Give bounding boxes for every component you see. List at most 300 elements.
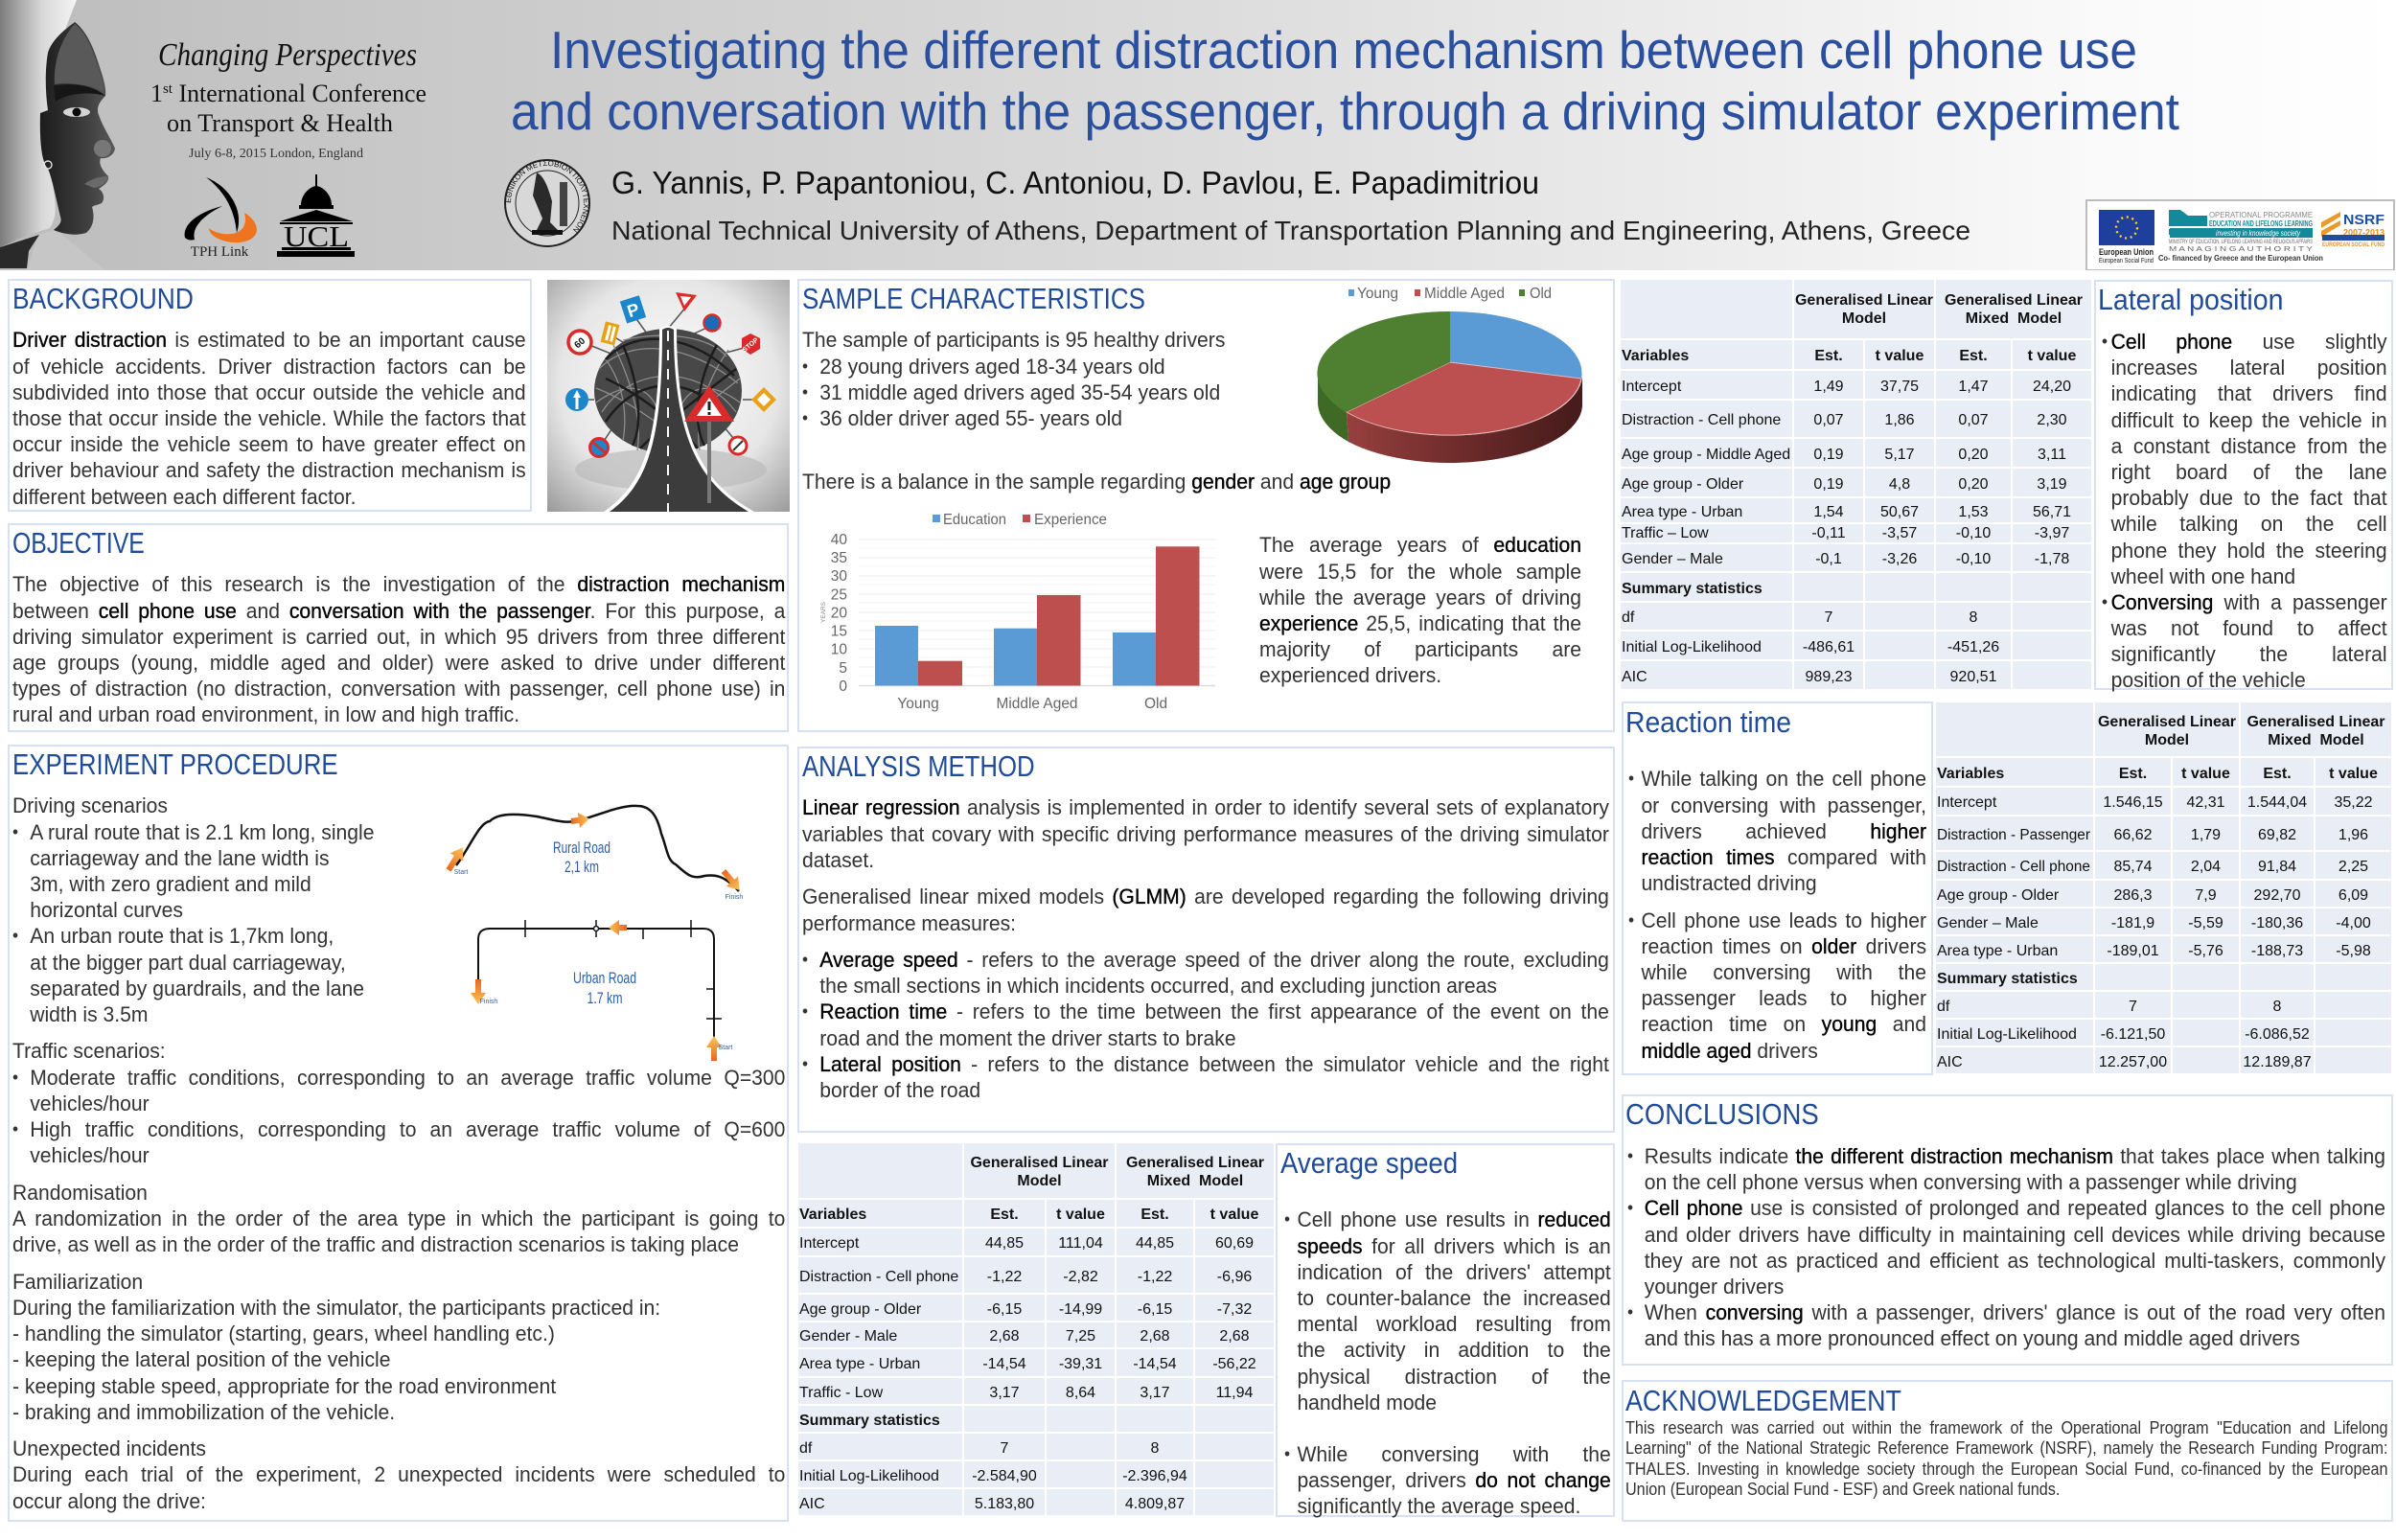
text: reaction time body: • <box>1628 910 1634 930</box>
panel: background <box>8 279 532 512</box>
table: reaction time results: Summary statistics <box>1937 970 2078 987</box>
table: lateral position results: 1,49 <box>1813 378 1844 395</box>
table: reaction time results: Gender – Male <box>1937 914 2039 931</box>
icon: face profile illusion <box>0 0 115 270</box>
table: reaction time results: -6.086,52 <box>2245 1025 2310 1043</box>
text: education and experience: experienced drivers. <box>1259 663 1441 687</box>
table: reaction time results: Age group - Older <box>1937 887 2059 903</box>
text: education and experience: majority of participants are <box>1259 637 1581 661</box>
table: average speed results: AIC <box>799 1495 825 1512</box>
table: reaction time results: 1,79 <box>2191 826 2221 843</box>
conference title text: International Conference <box>173 80 426 107</box>
text: lateral position body: significantly the lateral <box>2111 642 2387 666</box>
text: education and experience: The average years of education <box>1259 533 1581 557</box>
text: experiment procedure body: - handling the simulator (starting, gears, wheel handling etc.) <box>12 1322 555 1345</box>
title: and conversation with the passenger, through a driving simulator experiment <box>511 82 2179 141</box>
table: reaction time results: Model <box>2145 732 2189 747</box>
text: lateral position body: while talking on the cell <box>2111 512 2387 536</box>
conference title text <box>150 37 426 161</box>
text: experiment procedure body: - keeping the lateral position of the vehicle <box>12 1347 390 1371</box>
table: lateral position results: Model <box>1842 310 1886 327</box>
table: reaction time results: 2,04 <box>2191 859 2221 875</box>
text: analysis method body: Reaction time - refers to the time between the first appearance of the event on the <box>819 1000 1609 1023</box>
table: average speed results: 111,04 <box>1058 1235 1103 1252</box>
text: reaction time body: or conversing with passenger, <box>1641 793 1926 817</box>
table: reaction time results: Area type - Urban <box>1937 943 2058 958</box>
table: average speed results: 8,64 <box>1066 1384 1095 1401</box>
funding logos box: European Union <box>2099 247 2154 258</box>
table: average speed results: -2.396,94 <box>1122 1468 1187 1483</box>
diagram: rural and urban road routes: Finish <box>726 894 743 901</box>
table: lateral position results: 0,19 <box>1813 475 1844 493</box>
table: average speed results: 3,17 <box>1140 1384 1170 1401</box>
table: lateral position results: 0,07 <box>1813 412 1844 428</box>
table: lateral position results: 1,54 <box>1813 504 1844 519</box>
diagram: rural and urban road routes <box>447 805 743 1061</box>
heading: acknowledgement: ACKNOWLEDGEMENT <box>1625 1384 1901 1417</box>
icon: TPH Link logo: TPH Link <box>191 244 249 260</box>
funding logos box: MINISTRY OF EDUCATION, LIFELONG LEARNING AND RELIGIOUS AFFAIRS <box>2169 240 2313 245</box>
table: reaction time results: t value <box>2181 765 2230 782</box>
table: average speed results: t value <box>1210 1207 1258 1223</box>
text: acknowledgement body: Learning" of the National Strategic Reference Framework (NSRF), namely the Research Funding Program: <box>1625 1437 2388 1458</box>
text: experiment procedure body: Driving scenarios <box>12 793 168 817</box>
table: lateral position results: Gender – Male <box>1622 551 1723 567</box>
text: sample description: 28 young drivers aged 18-34 years old <box>819 355 1165 379</box>
funding logos box: investing in knowledge society <box>2216 229 2301 238</box>
text: lateral position body: increases lateral position <box>2111 356 2387 379</box>
heading: conclusions: CONCLUSIONS <box>1625 1097 1819 1131</box>
text: reaction time body: reaction times compared with <box>1641 845 1926 869</box>
icon: TPH Link logo <box>185 177 257 260</box>
text: analysis method body: the small sections in which incidents occurred, and excluding junction areas <box>819 974 1497 998</box>
funding logos box: OPERATIONAL PROGRAMME <box>2209 211 2313 219</box>
text: objective body: rural and urban road environment, in low and high traffic. <box>12 702 519 726</box>
text: experiment procedure body: drive, as well as in the order of the traffic and distraction scenarios is taking place <box>12 1232 739 1256</box>
chart: education and experience bars: Middle Aged <box>997 696 1077 712</box>
table: reaction time results: 7 <box>2129 999 2137 1014</box>
table: reaction time results: 35,22 <box>2334 794 2373 811</box>
table: reaction time results: Generalised Linear <box>2098 713 2236 730</box>
funding logos box: 2007-2013 <box>2343 228 2384 239</box>
panel: conclusions <box>1622 1094 2393 1366</box>
icon: road ball with traffic signs <box>547 280 790 512</box>
table: reaction time results: 7,9 <box>2195 887 2217 903</box>
panel: acknowledgement <box>1622 1380 2393 1522</box>
icon: road ball with traffic signs: 60 <box>573 335 587 351</box>
table: reaction time results: 1,96 <box>2338 826 2368 843</box>
diagram: rural and urban road routes: Start <box>454 869 468 876</box>
text: experiment procedure body: width is 3.5m <box>30 1002 148 1026</box>
text: analysis method body: performance measures: <box>802 911 1016 935</box>
heading: lateral position: Lateral position <box>2098 283 2283 316</box>
text: education and experience: experience 25,5, indicating that the <box>1259 611 1581 635</box>
table: reaction time results: 2,25 <box>2338 859 2368 875</box>
text: objective body: between cell phone use and conversation with the passenger. For this purpose, a <box>12 599 785 623</box>
table: average speed results: t value <box>1056 1207 1105 1223</box>
funding logos box <box>2086 200 2394 270</box>
panel: experiment procedure <box>8 745 789 1522</box>
chart: education and experience bars: Experience <box>1034 512 1107 528</box>
panel: lateral position <box>2094 280 2393 690</box>
table: average speed results: Gender - Male <box>799 1328 897 1345</box>
text: analysis method body: variables that covary with specific driving performance measures of the driving simulator <box>802 822 1609 846</box>
diagram: rural and urban road routes: Start <box>719 1045 732 1051</box>
panel: analysis method <box>797 747 1615 1133</box>
table: reaction time results: Distraction - Passenger <box>1937 826 2090 843</box>
text: sample description: There is a balance in the sample regarding gender and age group <box>802 470 1391 494</box>
heading: experiment procedure: EXPERIMENT PROCEDURE <box>12 747 338 781</box>
table: lateral position results: -0,10 <box>1956 551 1991 567</box>
text: lateral position body: indicating that drivers find <box>2111 381 2387 405</box>
table: average speed results: -2,82 <box>1063 1269 1098 1284</box>
table: lateral position results: 24,20 <box>2033 378 2071 395</box>
chart: 3D pie of age groups <box>1317 286 1582 463</box>
diagram: rural and urban road routes: 2,1 km <box>564 858 599 876</box>
table: average speed results: 44,85 <box>985 1235 1024 1252</box>
text: average speed body: handheld mode <box>1297 1391 1437 1414</box>
table: average speed results: Mixed Model <box>1147 1173 1243 1189</box>
icon: UCL logo <box>277 174 355 257</box>
table: lateral position results: 0,20 <box>1958 475 1989 493</box>
text: experiment procedure body: at the bigger part dual carriageway, <box>30 951 346 975</box>
table: lateral position results: 50,67 <box>1880 504 1919 519</box>
table: reaction time results: -180,36 <box>2251 914 2303 931</box>
diagram: rural and urban road routes: Rural Road <box>553 839 611 857</box>
text: conclusions body: they are not as practiced and efficient as technological multi-taskers, commonly <box>1645 1249 2385 1273</box>
table: lateral position results: Est. <box>1814 348 1843 364</box>
text: analysis method body <box>802 795 1609 1102</box>
icon: NTUA seal: ΕΘΝΙΚΟΝ ΜΕΤΣΟΒΙΟΝ ΠΟΛΥΤΕΧΝΕΙΟΝ <box>506 161 588 233</box>
text: average speed body: indication of the drivers' attempt <box>1297 1260 1611 1284</box>
table: reaction time results: -5,98 <box>2336 943 2371 958</box>
text: reaction time body: while conversing with the <box>1641 960 1926 984</box>
text: analysis method body: • <box>802 1054 808 1073</box>
text: acknowledgement body: Union (European Social Fund - ESF) and Greek national funds. <box>1625 1479 2060 1499</box>
table: average speed results: -7,32 <box>1217 1301 1252 1317</box>
text: analysis method body: dataset. <box>802 848 874 872</box>
table: lateral position results: 989,23 <box>1806 669 1852 684</box>
text: conclusions body: and this has a more pronounced effect on young and middle aged drivers <box>1645 1326 2300 1350</box>
funding logos box: EDUCATION AND LIFELONG LEARNING <box>2209 219 2313 228</box>
text: experiment procedure body: Familiarization <box>12 1270 143 1294</box>
table: average speed results: Generalised Linear <box>1126 1155 1264 1171</box>
funding logos box: NSRF <box>2343 212 2384 228</box>
text: lateral position body: was not found to affect <box>2111 616 2387 640</box>
table: lateral position results: -3,97 <box>2035 525 2069 541</box>
table: lateral position results: 3,11 <box>2038 447 2066 462</box>
text: lateral position body: right board of the lane <box>2111 460 2387 484</box>
table: average speed results: 5.183,80 <box>975 1495 1034 1512</box>
table: lateral position results: -3,26 <box>1882 551 1917 567</box>
table: average speed results: 3,17 <box>989 1384 1020 1401</box>
text: objective body <box>12 572 786 726</box>
table: lateral position results: 56,71 <box>2033 504 2071 519</box>
text: analysis method body: • <box>802 950 808 969</box>
table: lateral position results: -3,57 <box>1882 525 1917 541</box>
table: lateral position results: 0,20 <box>1958 447 1989 462</box>
text: background body: of vehicle accidents. Driver distraction factors can be <box>12 355 526 379</box>
text: analysis method body: • <box>802 1001 808 1021</box>
table: average speed results: -14,54 <box>1133 1356 1177 1372</box>
text: lateral position body: a constant distance from the <box>2111 434 2387 458</box>
table: reaction time results: -188,73 <box>2251 943 2303 958</box>
table: average speed results: Traffic - Low <box>799 1384 883 1401</box>
table: average speed results: Variables <box>799 1207 866 1223</box>
text: sample description: • <box>802 356 808 376</box>
table: average speed results: Summary statistics <box>799 1413 940 1428</box>
table: average speed results: 2,68 <box>1140 1328 1170 1345</box>
table: reaction time results: 12.257,00 <box>2099 1054 2167 1069</box>
table: reaction time results: 66,62 <box>2113 826 2153 843</box>
text: sample description: • <box>802 382 808 402</box>
table: average speed results: 2,68 <box>1219 1328 1250 1345</box>
text: education and experience <box>1259 533 1581 687</box>
text: experiment procedure body: vehicles/hour <box>30 1143 150 1167</box>
text: experiment procedure body: 3m, with zero gradient and mild <box>30 872 311 896</box>
chart: education and experience bars: Young <box>897 696 939 712</box>
text: lateral position body: probably due to the fact that <box>2111 486 2387 510</box>
chart: education and experience bars: 15 <box>831 623 847 640</box>
title: Investigating the different distraction mechanism between cell phone use <box>550 21 2137 80</box>
table: reaction time results: 8 <box>2273 999 2281 1014</box>
text: objective body: age groups (young, middle aged and older) were asked to drive under different <box>12 651 785 675</box>
text: average speed body: speeds for all drivers which is an <box>1297 1234 1611 1258</box>
text: lateral position body: difficult to keep the vehicle in <box>2111 408 2387 432</box>
text: experiment procedure body: Randomisation <box>12 1181 148 1205</box>
text: experiment procedure body: Traffic scenarios: <box>12 1039 166 1063</box>
table: reaction time results: Initial Log-Likelihood <box>1937 1025 2077 1043</box>
text: lateral position body: phone they hold the steering <box>2111 539 2387 562</box>
table: lateral position results: Mixed Model <box>1966 310 2062 327</box>
table: lateral position results: -0,10 <box>1956 525 1991 541</box>
icon: road ball with traffic signs: STOP <box>742 336 760 354</box>
panel: sample characteristics <box>797 279 1615 732</box>
text: lateral position body: Cell phone use slightly <box>2111 330 2387 354</box>
text: education and experience: were 15,5 for the whole sample <box>1259 560 1581 584</box>
text: experiment procedure body: During the familiarization with the simulator, the participants practiced in: <box>12 1296 660 1320</box>
conference title text: Changing Perspectives <box>158 37 417 73</box>
chart: education and experience bars <box>820 512 1215 712</box>
diagram: rural and urban road routes: Urban Road <box>573 969 636 987</box>
text: experiment procedure body: A randomization in the order of the area type in which the participant is going to <box>12 1207 785 1230</box>
text: lateral position body: • <box>2102 592 2108 611</box>
text: lateral position body: • <box>2102 332 2108 351</box>
table: lateral position results: -451,26 <box>1947 638 1999 655</box>
text: average speed body: Cell phone use results in reduced <box>1297 1207 1611 1231</box>
text: conclusions body: Cell phone use is consisted of prolonged and repeated glances to the cell phone <box>1645 1196 2385 1220</box>
text: analysis method body: Average speed - refers to the average speed of the driver along the route, excluding <box>819 948 1609 972</box>
chart: 3D pie of age groups: Young <box>1357 286 1398 302</box>
header banner <box>0 0 2396 270</box>
table: reaction time results: 12.189,87 <box>2243 1054 2312 1069</box>
text: sample description: • <box>802 408 808 427</box>
text: reaction time body: Cell phone use leads to higher <box>1641 908 1926 932</box>
text: lateral position body <box>2102 330 2387 692</box>
table: average speed results: -1,22 <box>1138 1269 1172 1284</box>
text: experiment procedure body: - keeping stable speed, appropriate for the road environment <box>12 1374 556 1397</box>
table: average speed results: 60,69 <box>1215 1235 1254 1252</box>
table: average speed results: 44,85 <box>1136 1235 1174 1252</box>
table: average speed results: -39,31 <box>1059 1356 1102 1372</box>
table: average speed results: Est. <box>990 1207 1019 1223</box>
table: lateral position results: Intercept <box>1622 378 1681 395</box>
text: experiment procedure body: An urban route that is 1,7km long, <box>30 924 334 948</box>
table: lateral position results: 0,07 <box>1958 412 1989 428</box>
text: conclusions body: on the cell phone versus when conversing with a passenger while driving <box>1645 1170 2297 1194</box>
table: average speed results: -56,22 <box>1212 1356 1256 1372</box>
table: lateral position results: df <box>1622 609 1634 626</box>
conference title text: July 6-8, 2015 London, England <box>189 147 363 161</box>
funding logos box: Co- financed by Greece and the European Union <box>2158 254 2323 263</box>
text: reaction time body: drivers achieved higher <box>1641 819 1926 843</box>
table: reaction time results: 42,31 <box>2186 794 2225 811</box>
table: lateral position results <box>1621 280 2093 691</box>
heading: analysis method: ANALYSIS METHOD <box>802 749 1035 783</box>
chart: education and experience bars: 5 <box>839 660 847 677</box>
text: experiment procedure body: • <box>12 822 18 841</box>
text: background body: subdivided into those that occur outside the vehicle and <box>12 380 526 404</box>
chart: education and experience bars: 30 <box>831 568 847 585</box>
text: average speed body: to counter-balance the increased <box>1297 1286 1611 1310</box>
table: reaction time results: -181,9 <box>2111 914 2154 931</box>
table: reaction time results: Distraction - Cell phone <box>1937 859 2090 875</box>
table: reaction time results: -5,59 <box>2188 914 2223 931</box>
table: lateral position results: 8 <box>1970 609 1977 626</box>
text: education and experience: while the average years of driving <box>1259 586 1581 609</box>
chart: education and experience bars: YEARS <box>820 601 827 623</box>
text: experiment procedure body: separated by guardrails, and the lane <box>30 977 364 1000</box>
chart: education and experience bars: 25 <box>831 586 847 604</box>
table: average speed results: df <box>799 1439 812 1457</box>
panel: average speed <box>1276 1143 1615 1517</box>
table: reaction time results: Est. <box>2119 765 2147 782</box>
table: average speed results: 7,25 <box>1066 1328 1095 1345</box>
text: objective body: The objective of this research is the investigation of the distraction mechanism <box>12 572 785 596</box>
table: average speed results: 2,68 <box>989 1328 1020 1345</box>
text: average speed body: significantly the average speed. <box>1297 1494 1580 1518</box>
text: analysis method body: Linear regression analysis is implemented in order to identify several sets of explanatory <box>802 795 1609 819</box>
table: average speed results <box>798 1143 1276 1517</box>
text: lateral position body: position of the vehicle <box>2111 668 2306 692</box>
table: reaction time results: 85,74 <box>2113 859 2153 875</box>
table: average speed results: Model <box>1017 1173 1062 1189</box>
table: average speed results: Area type - Urban <box>799 1356 920 1372</box>
table: lateral position results: Variables <box>1622 348 1689 364</box>
text: acknowledgement body: This research was carried out within the framework of the Operational Program "Education and Lifelong <box>1625 1417 2388 1437</box>
table: lateral position results: Generalised Linear <box>1945 292 2083 309</box>
table: lateral position results: -486,61 <box>1803 638 1855 655</box>
table: average speed results: -2.584,90 <box>972 1468 1037 1483</box>
text: average speed body <box>1284 1207 1611 1518</box>
table: average speed results: Distraction - Cell phone <box>799 1269 958 1284</box>
chart: 3D pie of age groups: Middle Aged <box>1424 286 1505 302</box>
table: reaction time results: 6,09 <box>2338 887 2368 903</box>
text: conclusions body: • <box>1627 1146 1633 1165</box>
text: reaction time body: • <box>1628 769 1634 788</box>
text: average speed body: passenger, drivers do not change <box>1297 1468 1611 1492</box>
table: lateral position results: t value <box>1876 348 1924 364</box>
table: lateral position results: 920,51 <box>1950 669 1996 684</box>
table: reaction time results: Intercept <box>1937 794 1996 811</box>
table: reaction time results: -6.121,50 <box>2101 1025 2165 1043</box>
text: average speed body: • <box>1284 1444 1290 1463</box>
text: experiment procedure body: occur along the drive: <box>12 1489 206 1513</box>
text: sample description <box>802 328 1391 494</box>
heading: objective: OBJECTIVE <box>12 526 145 560</box>
table: reaction time results: 1.544,04 <box>2247 794 2307 811</box>
text: background body: different between each different factor. <box>12 485 357 509</box>
table: reaction time results: AIC <box>1937 1054 1963 1069</box>
table: average speed results: Age group - Older <box>799 1301 921 1317</box>
table: average speed results: -14,99 <box>1059 1301 1102 1317</box>
text: background body: driver behaviour and safety the distraction mechanism is <box>12 458 526 482</box>
conference title text: st <box>163 81 173 97</box>
diagram: rural and urban road routes: 1.7 km <box>587 989 623 1007</box>
table: lateral position results: 37,75 <box>1880 378 1919 395</box>
table: lateral position results: 2,30 <box>2037 412 2067 428</box>
text: sample description: The sample of participants is 95 healthy drivers <box>802 328 1225 352</box>
table: reaction time results: -4,00 <box>2336 914 2371 931</box>
text: average speed body: physical distraction of the <box>1297 1365 1611 1389</box>
text: reaction time body: middle aged drivers <box>1641 1039 1818 1063</box>
text: conclusions body: younger drivers <box>1645 1275 1784 1299</box>
text: acknowledgement body <box>1625 1417 2388 1499</box>
text: experiment procedure body: - braking and immobilization of the vehicle. <box>12 1400 395 1424</box>
text: sample description: 31 middle aged drivers aged 35-54 years old <box>819 380 1220 404</box>
table: lateral position results: -1,78 <box>2035 551 2069 567</box>
heading: background: BACKGROUND <box>12 282 194 315</box>
text: experiment procedure body: carriageway and the lane width is <box>30 846 330 870</box>
table: average speed results: -6,96 <box>1217 1269 1252 1284</box>
text: experiment procedure body: Moderate traffic conditions, corresponding to an average traffic volume Q=300 <box>30 1066 785 1090</box>
table: reaction time results: Est. <box>2263 765 2292 782</box>
table: average speed results: Generalised Linear <box>970 1155 1109 1171</box>
text: background body: occur inside the vehicle seem to have greater effect on <box>12 432 526 456</box>
text: average speed body: • <box>1284 1209 1290 1229</box>
table: lateral position results: Est. <box>1959 348 1988 364</box>
table: lateral position results: 5,17 <box>1884 447 1915 462</box>
conference title text: 1 <box>150 80 163 107</box>
table: average speed results: -6,15 <box>987 1301 1022 1317</box>
table: reaction time results: df <box>1937 999 1949 1014</box>
chart: education and experience bars: Education <box>943 512 1006 528</box>
text: reaction time body: reaction times on older drivers <box>1641 934 1926 958</box>
diagram: rural and urban road routes: Finish <box>480 999 497 1005</box>
text: experiment procedure body: • <box>12 926 18 945</box>
table: lateral position results: AIC <box>1622 669 1647 684</box>
text: reaction time body: passenger leads to higher <box>1641 986 1926 1010</box>
text: background body <box>12 328 526 509</box>
text: lateral position body: wheel with one hand <box>2111 564 2295 588</box>
table: lateral position results: Distraction - Cell phone <box>1622 412 1781 428</box>
table: reaction time results: 292,70 <box>2254 887 2300 903</box>
chart: education and experience bars: 10 <box>831 642 847 657</box>
table: lateral position results: 7 <box>1825 609 1832 626</box>
icon: UCL logo: UCL <box>284 219 349 253</box>
text: average speed body: the activity in addition to the <box>1297 1338 1611 1362</box>
table: reaction time results: Mixed Model <box>2268 732 2364 747</box>
text: conclusions body: Results indicate the different distraction mechanism that takes place when talking <box>1645 1144 2385 1168</box>
text: average speed body: mental workload resulting from <box>1297 1312 1611 1336</box>
table: lateral position results: -0,11 <box>1811 525 1846 541</box>
text: reaction time body: While talking on the cell phone <box>1641 767 1926 791</box>
text: experiment procedure body: A rural route that is 2.1 km long, single <box>30 820 374 844</box>
table: lateral position results: 1,47 <box>1958 378 1989 395</box>
chart: education and experience bars: Old <box>1144 696 1167 712</box>
table: lateral position results: 1,53 <box>1958 504 1989 519</box>
table: reaction time results: -5,76 <box>2188 943 2223 958</box>
